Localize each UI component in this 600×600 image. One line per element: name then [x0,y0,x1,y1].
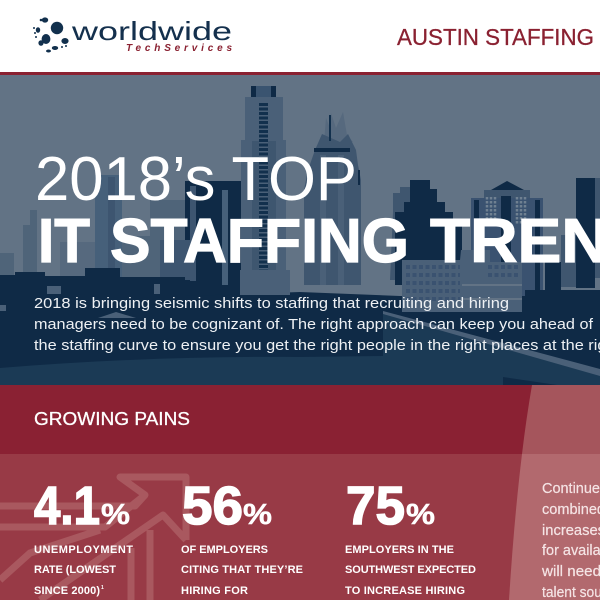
dark city base [0,268,600,385]
right towers [525,178,600,385]
stat: 56% of employers: HIRING FOR [181,585,248,597]
stat: 56% of employers: % [243,499,272,531]
road [0,356,400,385]
stat: 4.1% unemployment: SINCE 2000) [34,585,100,597]
stat: 56% of employers: 56 [182,476,243,536]
stat: 4.1% unemployment: RATE (LOWEST [34,564,116,576]
stat: 4.1% unemployment [34,476,133,597]
dark mid buildings [160,181,245,296]
title line 1: 2018’s TOP [35,145,357,214]
intro paragraph [34,295,600,354]
stat: 75% employers in the southwest: SOUTHWEST EXPECTED [345,564,476,576]
intro paragraph: managers need to be cognizant of. The right approach can keep you ahead of [34,316,594,333]
logo: worldwide TechServices: TechServices [126,43,232,54]
domed building [471,181,543,308]
far buildings left [0,175,190,293]
right panel [509,385,600,600]
nav heading: Austin Staffing: AUSTIN STAFFING [397,24,594,50]
section heading: Growing Pains: GROWING PAINS [34,408,190,429]
title line 2: IT [38,207,90,276]
right panel text: will need [541,564,600,580]
low blocks left [0,270,290,318]
stepped building [390,180,462,285]
title line 2: STAFFING [110,207,409,276]
frost tower [304,112,361,285]
stat: 4.1% unemployment: UNEMPLOYMENT [34,544,133,556]
stat: 75% employers in the southwest [345,476,476,597]
logo: worldwide TechServices [33,16,232,54]
stat: 75% employers in the southwest: % [406,499,435,531]
stat: 56% of employers: CITING THAT THEY’RE [181,564,303,576]
right panel text [541,481,600,600]
logo: worldwide TechServices: worldwide [71,16,232,46]
section body band [0,454,600,600]
stat: 75% employers in the southwest: 75 [346,476,405,536]
stat: 4.1% unemployment: 4.1 [34,476,100,536]
arrow graphic [0,477,186,600]
stat: 56% of employers [181,476,303,597]
panel: hero skyline [0,75,600,385]
office tower [241,86,286,280]
stat: 4.1% unemployment: 1 [101,585,104,591]
intro paragraph: 2018 is bringing seismic shifts to staffing that recruiting and hiring [34,295,509,312]
section header band [0,385,600,454]
low office block [402,250,572,385]
intro paragraph: the staffing curve to ensure you get the right people in the right places at the right time. [34,337,600,354]
stat: 56% of employers: OF EMPLOYERS [181,544,268,556]
title line 2 [38,207,600,276]
stat: 75% employers in the southwest: EMPLOYERS IN THE [345,544,454,556]
stat: 75% employers in the southwest: TO INCREASE HIRING [345,585,465,597]
header rule [0,72,600,75]
stat: 4.1% unemployment: % [101,499,130,531]
